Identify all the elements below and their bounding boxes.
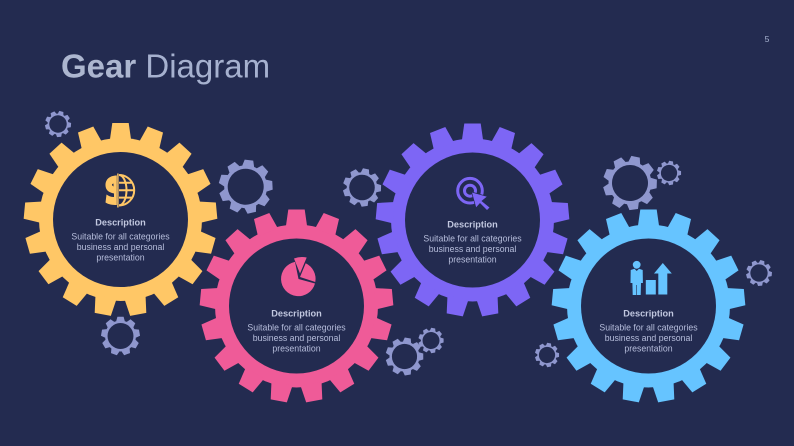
page number: 5 xyxy=(765,34,770,44)
description text: Suitable for all categories xyxy=(71,232,170,242)
small gear: above blue large xyxy=(598,151,662,215)
small gear: below yellow xyxy=(101,317,140,356)
panel: blue gear xyxy=(551,210,746,403)
heading: Description xyxy=(623,308,674,318)
description text: presentation xyxy=(96,252,145,262)
description text: Suitable for all categories xyxy=(599,322,698,332)
description text: Suitable for all categories xyxy=(247,322,346,332)
panel: pink gear xyxy=(199,210,394,403)
icon: dollar globe xyxy=(106,174,134,208)
description text: presentation xyxy=(624,344,673,354)
small gear: right of pink small xyxy=(416,326,446,355)
small gear: right of pink large xyxy=(382,335,427,379)
pink gear shape xyxy=(199,210,394,403)
yellow gear shape xyxy=(23,123,218,316)
description text: business and personal xyxy=(605,333,692,343)
heading: Description xyxy=(447,219,498,229)
panel: yellow gear xyxy=(23,123,218,316)
small gear: right of blue xyxy=(743,257,775,289)
description text: business and personal xyxy=(77,242,164,252)
description text: presentation xyxy=(448,254,497,264)
title: Gear Diagram xyxy=(61,48,270,84)
icon: pie chart xyxy=(281,257,316,296)
heading: Description xyxy=(271,308,322,318)
blue gear shape xyxy=(551,210,746,403)
heading: Description xyxy=(95,217,146,227)
small gear: left of purple xyxy=(339,165,385,210)
small gear: above blue small xyxy=(655,159,683,187)
icon: person with growth chart xyxy=(630,261,672,295)
purple gear shape xyxy=(375,124,570,317)
description text: presentation xyxy=(272,344,321,354)
icon: target cursor xyxy=(458,178,490,210)
description text: business and personal xyxy=(429,244,516,254)
description text: business and personal xyxy=(253,333,340,343)
small gear: left of blue xyxy=(533,341,561,369)
panel: purple gear xyxy=(375,124,570,317)
description text: Suitable for all categories xyxy=(423,234,522,244)
small gear: right of yellow xyxy=(215,157,276,217)
small gear: top left xyxy=(42,108,74,140)
